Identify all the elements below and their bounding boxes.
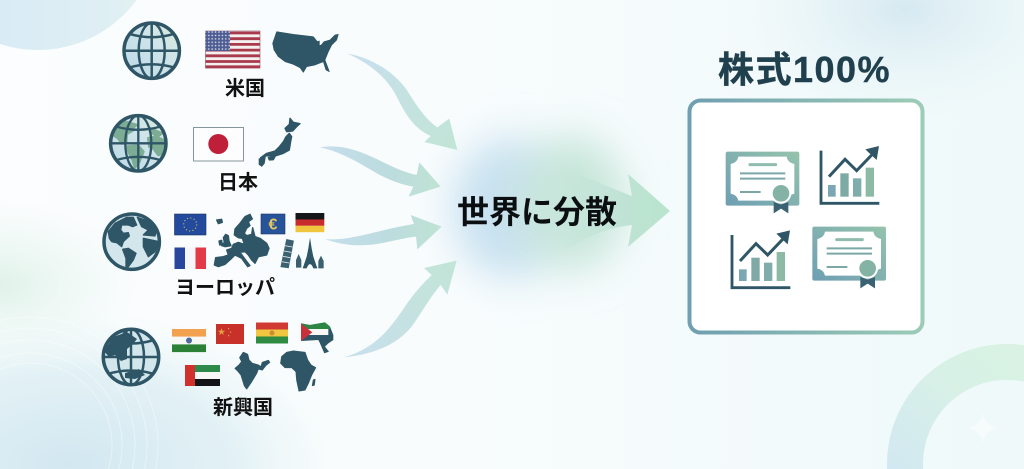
section: 日本 [110,115,300,194]
map: Japan [259,118,300,166]
map: Africa [281,351,316,391]
section: 新興国 [103,322,334,419]
flag: France [174,248,206,269]
icon: globe Americas green [110,115,166,171]
label: ヨーロッパ: ヨーロッパ [175,276,275,299]
icon: bar chart 1 [821,146,879,203]
icon: landmarks Pisa and Eiffel [281,238,324,268]
arrow: to the right [560,168,670,250]
central glow [452,135,626,278]
map: Europe [214,214,269,267]
flag: India [172,329,206,352]
map: USA [273,32,338,72]
heading: 株式100%: 株式100% [718,49,891,90]
decoration: bottom-left concentric rings [0,317,158,469]
flag: USA [206,31,260,68]
flag: EU [174,214,206,235]
arrow: from 米国 [347,53,457,150]
flag map: Sudan shape [301,322,334,353]
flag: euro [261,214,285,234]
decoration: top-left circle [0,0,136,50]
panel: stock holdings [690,100,922,332]
arrow: from 日本 [320,146,441,197]
icon: certificate 1 [726,152,799,213]
label: 新興国: 新興国 [213,396,273,419]
label: 米国: 米国 [225,77,265,100]
flag: Bolivia [256,322,288,344]
icon: certificate 2 [812,227,886,288]
section: ヨーロッパ [104,213,324,299]
decoration: bottom-right ring with sparkle [887,344,1024,469]
icon: bar chart 2 [732,230,790,288]
heading: 世界に分散: 世界に分散 [457,194,617,230]
flag: Japan [194,128,244,161]
icon: globe grid [124,23,180,79]
flag: euro: € [269,216,278,234]
arrow: from ヨーロッパ [325,215,442,249]
flag: China [216,324,244,344]
map: India [235,352,270,389]
arrows: regions to centre [320,53,457,357]
flag: Germany [296,213,324,232]
flag: UAE [185,365,220,386]
icon: globe Americas dark [104,214,159,269]
icon: globe Asia [103,329,159,385]
arrow: from 新興国 [343,261,457,357]
label: 日本: 日本 [218,171,258,194]
section: 米国 [124,23,338,100]
